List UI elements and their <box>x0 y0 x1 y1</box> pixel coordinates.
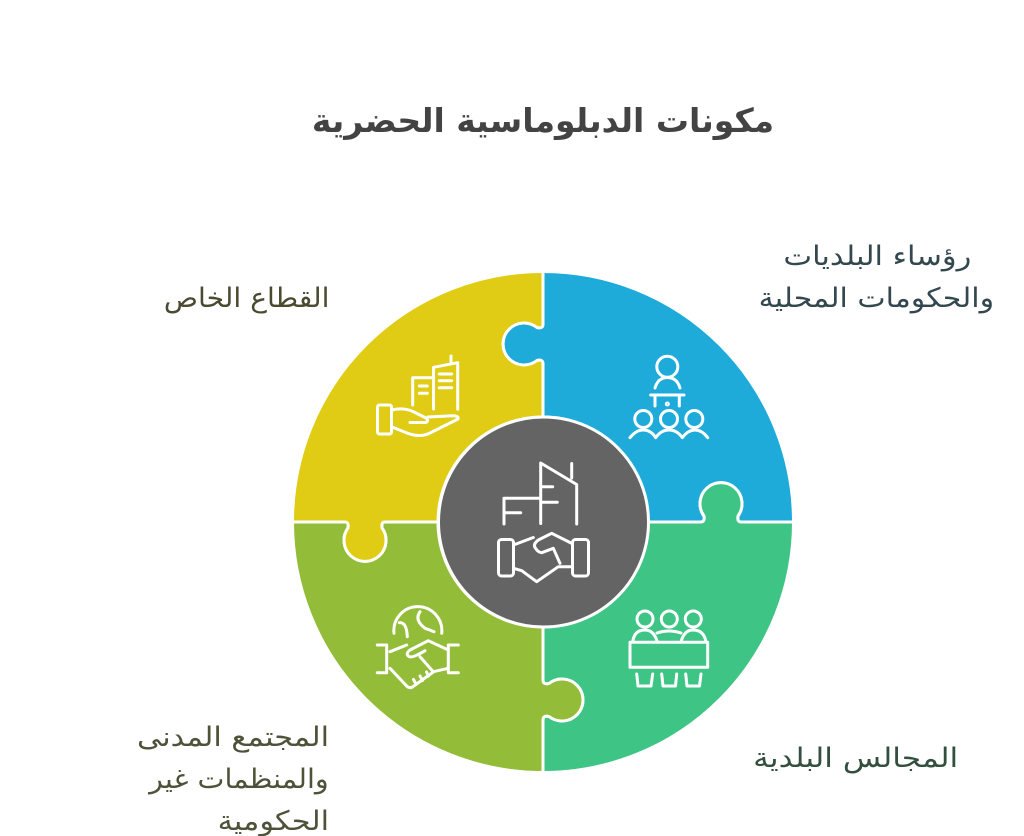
label: civil society and NGOs: والمنظمات غير <box>149 764 329 795</box>
icon: globe and handshake <box>377 607 458 688</box>
piece: olive bottom left <box>292 522 583 772</box>
piece: yellow top left <box>292 272 543 561</box>
icon: center buildings and handshake <box>498 463 588 582</box>
piece: green bottom right <box>543 483 794 772</box>
icon: speaker and audience <box>630 356 708 438</box>
icon: hand holding buildings <box>378 356 458 436</box>
title: مكونات الدبلوماسية الحضرية <box>312 101 774 140</box>
label: municipal councils: المجالس البلدية <box>753 743 958 774</box>
label: mayors and local governments: والحكومات المحلية <box>759 283 994 314</box>
label: mayors and local governments: رؤساء البلديات <box>783 241 971 272</box>
icon: council table <box>630 611 708 686</box>
center circle <box>438 417 648 627</box>
label: mayors and local governments <box>759 241 994 314</box>
label: civil society and NGOs <box>137 722 329 836</box>
label: civil society and NGOs: المجتمع المدنى <box>137 722 329 753</box>
piece: blue top right <box>503 272 794 522</box>
label: private sector: القطاع الخاص <box>163 283 329 314</box>
